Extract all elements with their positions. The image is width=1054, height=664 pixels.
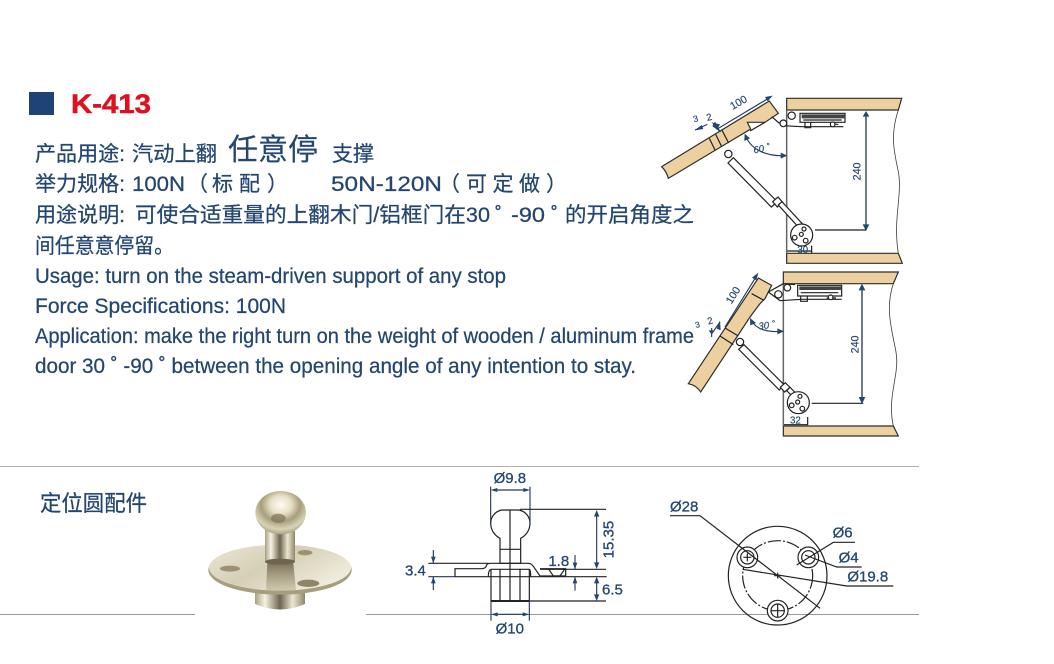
- diagram: door opening at 30 degrees: 100: [724, 285, 743, 306]
- English description text: door 30 ˚ -90 ˚ between the opening angle of any intention to stay.: [35, 354, 636, 378]
- Chinese description text: 100N: [132, 173, 185, 196]
- diagram: door opening at 60 degrees: 2: [705, 112, 713, 124]
- technical drawing: side view with dimensions: 15.35: [600, 521, 617, 558]
- Chinese description text: 50N-120N: [331, 173, 442, 196]
- diagram: door opening at 60 degrees: 240: [851, 162, 863, 180]
- technical drawing: side view with dimensions: [405, 470, 623, 637]
- Chinese description text: 标配: [212, 173, 260, 196]
- technical drawing: side view with dimensions: 6.5: [602, 581, 623, 598]
- divider: upper: [0, 466, 919, 468]
- diagram: door opening at 30 degrees: 3: [694, 319, 701, 330]
- technical drawing: side view with dimensions: 1.8: [548, 553, 569, 570]
- Chinese description text: ）: [546, 173, 567, 196]
- Chinese description text: 举力规格:: [35, 173, 125, 196]
- Chinese description text: 可定做: [466, 173, 540, 196]
- Chinese description text: 支撑: [332, 143, 374, 166]
- Chinese description text: 产品用途:: [35, 143, 125, 166]
- technical drawing: side view with dimensions: Ø10: [496, 620, 524, 637]
- technical drawing: top view with dimensions: Ø6: [833, 525, 853, 542]
- technical drawing: top view with dimensions: Ø19.8: [847, 568, 888, 585]
- Chinese description text: 用途说明:: [35, 204, 125, 227]
- title: K-413: K-413: [71, 89, 151, 119]
- Chinese description text: 间任意意停留。: [35, 235, 174, 258]
- diagram: door opening at 60 degrees: [662, 93, 902, 263]
- technical drawing: top view with dimensions: Ø28: [670, 498, 698, 515]
- Chinese description text: ˚: [551, 204, 558, 227]
- diagram: door opening at 60 degrees: 3: [692, 113, 699, 124]
- diagram: door opening at 30 degrees: 30 ˚: [758, 320, 776, 332]
- English description text: [35, 264, 694, 378]
- technical drawing: side view with dimensions: Ø9.8: [494, 470, 526, 487]
- diagram: door opening at 60 degrees: 30: [797, 245, 808, 256]
- English description text: Force Specifications: 100N: [35, 294, 286, 318]
- product photo: ball stud: [208, 491, 352, 609]
- Chinese description text: ）: [267, 173, 288, 196]
- Chinese description text: 可使合适重量的上翻木门/铝框门在30: [135, 204, 490, 227]
- Chinese description text: 的开启角度之: [565, 204, 694, 227]
- Chinese description text: [35, 134, 694, 258]
- Chinese description text: 汽动上翻: [132, 143, 217, 166]
- Chinese description text: -90: [511, 204, 545, 227]
- diagram: door opening at 60 degrees: 60 ˚: [753, 142, 772, 156]
- Chinese description text: （: [439, 173, 460, 196]
- Chinese description text: ˚: [495, 204, 502, 227]
- technical drawing: side view with dimensions: 3.4: [405, 562, 426, 579]
- diagram: door opening at 30 degrees: 32: [790, 415, 801, 426]
- diagram: door opening at 30 degrees: 2: [706, 316, 714, 328]
- Chinese description text: 任意停: [228, 134, 318, 167]
- diagram: door opening at 30 degrees: [688, 272, 898, 436]
- diagram: door opening at 30 degrees: 240: [849, 335, 861, 353]
- diagram: door opening at 60 degrees: 100: [728, 93, 750, 113]
- English description text: Usage: turn on the steam-driven support of any stop: [35, 264, 506, 288]
- heading: positioning disc fitting: 定位圆配件: [40, 491, 147, 516]
- Chinese description text: （: [187, 173, 208, 196]
- technical drawing: top view with dimensions: [670, 498, 893, 625]
- technical drawing: top view with dimensions: Ø4: [839, 549, 859, 566]
- English description text: Application: make the right turn on the weight of wooden / aluminum frame: [35, 324, 694, 348]
- divider: lower: [0, 614, 919, 616]
- title marker: blue square: [29, 92, 54, 115]
